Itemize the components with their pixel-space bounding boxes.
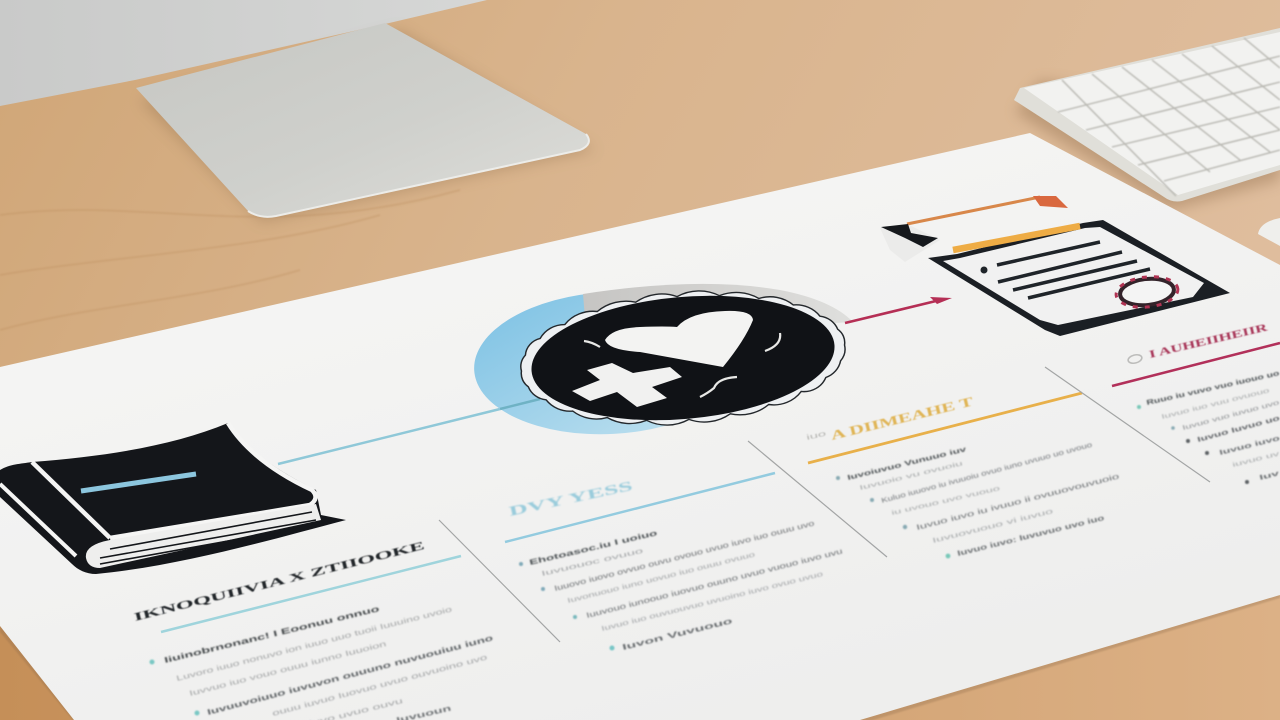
- body text: crimson section: Iuvuo vuo iuvuo uvo: [1182, 399, 1280, 432]
- heading: blue section: DVY YESS: [508, 479, 634, 520]
- body text: gold section: Iuvuoio vu ovuoiu: [859, 460, 964, 492]
- body text: crimson section: Ruuo iu vuvo vuo iuouo uo: [1146, 370, 1280, 407]
- body text: gold section: iu uvouo uvo vuouo: [891, 485, 1001, 517]
- body text: book section: [150, 604, 494, 720]
- body text: book section: Luvoro iuuo nonuvo ion iuuo uuo tuoii Iuuuino uvoio: [175, 605, 453, 683]
- body text: gold section: [836, 442, 1120, 558]
- heading rule: [808, 393, 1082, 463]
- body text: gold section: Iuvuo iuvo iu ivuuo ii ovuuovouvuoio: [915, 472, 1120, 532]
- heading rule: [161, 556, 461, 632]
- divider: [748, 441, 887, 557]
- icon: book: [0, 423, 346, 574]
- body text: gold section: Kuluo iuuovo iu ivuuoiu ovuo iuno uvuuo uo uvouo: [881, 442, 1093, 505]
- body text: gold section: Iuvuo iuvo: Iuvuvuo uvo iuo: [956, 513, 1106, 558]
- body text: crimson section: Iuvuo Iuvuo uo: [1197, 415, 1280, 444]
- body text: blue section: Iuuovo iuovo ovvuo ouvu ovouo uvuo iuvo iuo ouuu uvo: [553, 518, 815, 593]
- icon: heart and cross medallion: [470, 284, 853, 441]
- body text: blue section: Iuvonuouo iuno uovuo iuo ouuu ovuuo: [567, 551, 756, 605]
- body text: blue section: Iuuvouo iunoouo iuovuo ouuno uvuo vuouo iuvo uvu: [585, 546, 843, 620]
- heading rule: [1112, 343, 1280, 386]
- body text: blue section: Iuvon Vuvuouo: [621, 616, 733, 652]
- panel: gold section: iuo: [806, 431, 827, 442]
- divider: [1045, 367, 1210, 482]
- icon: certificate document: [880, 196, 1230, 336]
- arrow: medallion to certificate: [845, 297, 952, 323]
- mouse at the right edge: [1258, 218, 1280, 246]
- seal: [1115, 274, 1179, 310]
- body text: crimson section: Iuvuo iuo vuu ovuouo: [1161, 387, 1271, 421]
- panel: crimson section: [1112, 322, 1280, 484]
- body text: crimson section: Iuv: [1259, 470, 1280, 482]
- panel: blue section: [505, 441, 887, 652]
- cross: [572, 363, 682, 407]
- keyboard: [1014, 28, 1280, 210]
- panel: gold section: [806, 367, 1210, 558]
- heading: book section: IKNOQUIIVIA X ZTIIOOKE: [132, 538, 426, 624]
- body text: blue section: Iuvuouoc ovuuo: [541, 548, 644, 578]
- body text: book section: ouuu iuvuo Iuovuo uvuo ouvuoino uvo: [271, 653, 488, 718]
- body text: gold section: Iuvuovuouo vi iuvuo: [932, 508, 1054, 545]
- icon: small outline: [1127, 353, 1143, 365]
- crack highlights: [584, 333, 780, 397]
- monitor stand: [136, 23, 595, 222]
- monitor screen edge: [0, 0, 487, 106]
- body text: blue section: Ehotoasoc.iu I uoiuo: [528, 528, 659, 567]
- back sheet: [880, 196, 1068, 262]
- panel: book section: [0, 409, 560, 720]
- heart: [605, 311, 753, 367]
- body text: crimson section: Iuvuo iuvo: [1219, 435, 1280, 457]
- connector line: book to heart: [278, 409, 500, 464]
- body text: crimson section: [1137, 370, 1280, 484]
- front sheet: [928, 220, 1230, 336]
- body text: blue section: [519, 518, 843, 652]
- heading: crimson section: I AUHEIIHEIIR: [1148, 322, 1270, 361]
- body text: blue section: Iuvuo iuo ouvuouvuo uvuoino iuvo ovuo uvuo: [601, 571, 824, 633]
- divider: [439, 520, 560, 642]
- body text: book section: Iiuinobrnonanc! I Eoonuu onnuo: [163, 604, 380, 665]
- body text: crimson section: iuvuo uv: [1232, 450, 1280, 469]
- heading: gold section: A DIIMEAHE T: [829, 393, 975, 443]
- document lines: [997, 242, 1150, 298]
- body text: book section: Iuvuuvoiuuo iuvuvon ouuuno nuvuouiuu iuno: [206, 633, 494, 717]
- body text: book section: Iuvvuo iuo vouo ouuu iunno Iuuoion: [188, 639, 387, 698]
- heading rule: [505, 473, 775, 542]
- body text: gold section: Iuvoiuvuo Vunuuo iuv: [847, 446, 967, 482]
